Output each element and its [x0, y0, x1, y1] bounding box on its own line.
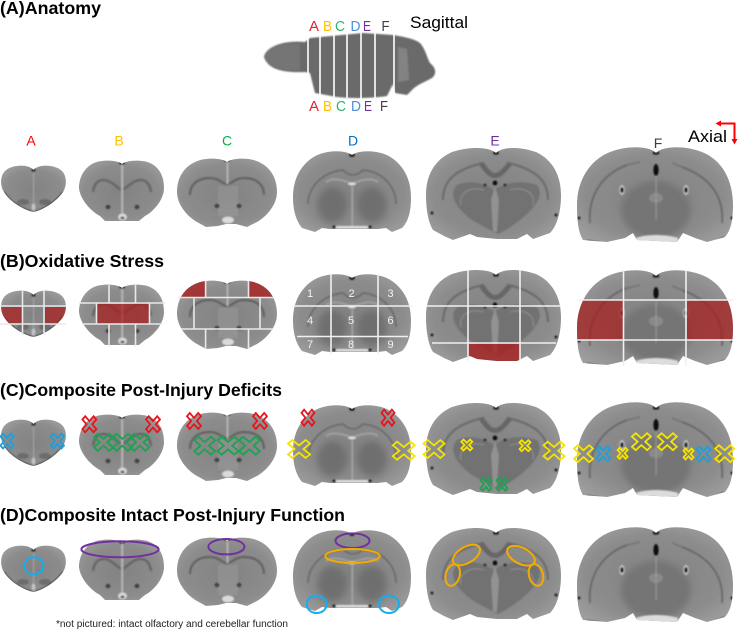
slice D with grid and region numbers: 3	[387, 288, 394, 300]
bottom slice letters: B	[323, 99, 332, 115]
slice D	[293, 151, 411, 232]
title: (B) Oxidative Stress: (B)Oxidative Stress	[0, 251, 164, 271]
title: (C) Composite Post-Injury Deficits: (C)Composite Post-Injury Deficits	[0, 380, 282, 400]
column letters	[26, 132, 662, 151]
row D: intact function slices	[1, 527, 733, 623]
slice C with grid	[177, 277, 278, 349]
slice B	[79, 161, 164, 221]
top slice letters: C	[335, 19, 345, 35]
purple ovals	[81, 533, 370, 557]
slice C	[177, 537, 277, 606]
slice D with grid and region numbers: 6	[387, 315, 394, 327]
top slice letters: F	[382, 19, 390, 35]
slice F	[577, 402, 734, 498]
column letters: C	[222, 132, 232, 148]
slice A with grid	[0, 291, 67, 337]
slice B with grid	[79, 285, 165, 346]
column letters: F	[654, 135, 662, 151]
slice E with grid	[426, 270, 561, 364]
slice C	[177, 412, 277, 481]
slice E	[426, 403, 561, 495]
green X markers	[94, 434, 508, 491]
slice D with grid and region numbers: 4	[307, 315, 313, 327]
column letters: B	[114, 132, 124, 148]
slice D with grid and region numbers: 7	[307, 339, 313, 351]
slice C	[177, 158, 277, 227]
slice D	[293, 530, 411, 611]
bottom slice letters: D	[351, 99, 361, 115]
bottom slice letters	[309, 99, 388, 115]
slice D with grid and region numbers: 2	[348, 288, 355, 300]
slice A	[1, 546, 66, 592]
bottom slice letters: E	[364, 99, 372, 115]
row C: post-injury deficit slices	[1, 402, 733, 498]
top slice letters: E	[363, 19, 371, 35]
slice A	[1, 166, 66, 212]
top slice letters: B	[323, 19, 332, 35]
label: Sagittal: Sagittal	[410, 14, 468, 32]
footnote: *not pictured: intact olfactory and cerebellar function	[56, 619, 288, 630]
bottom slice letters: A	[309, 99, 319, 115]
slice B	[79, 540, 164, 600]
slice A	[1, 420, 66, 466]
top slice letters	[309, 19, 390, 35]
top slice letters: A	[309, 19, 319, 35]
slice D with grid and region numbers: 8	[348, 339, 354, 351]
bottom slice letters: F	[380, 99, 388, 115]
label: Axial: Axial	[688, 127, 727, 146]
slice B	[79, 415, 164, 475]
blue X markers	[0, 434, 710, 462]
orange ovals	[325, 541, 546, 587]
row B: oxidative stress slices	[0, 270, 736, 366]
bottom slice letters: C	[336, 99, 346, 115]
sagittal brain view with slice lines	[264, 30, 435, 99]
red X markers	[82, 410, 395, 432]
slice D with grid and region numbers: 9	[387, 339, 394, 351]
yellow X markers	[288, 433, 734, 462]
row A: anatomy brain slices	[1, 147, 733, 243]
slice F	[577, 527, 734, 623]
slice E	[426, 148, 561, 240]
slice D with grid and region numbers: 5	[348, 315, 354, 327]
column letters: D	[348, 132, 358, 148]
blue ovals	[24, 557, 399, 613]
slice D	[293, 405, 411, 486]
arrow: axial orientation	[716, 120, 738, 144]
slice D with grid and region numbers	[292, 274, 412, 355]
column letters: A	[26, 132, 36, 148]
slice F	[577, 147, 734, 243]
slice D with grid and region numbers: 1	[307, 288, 313, 300]
slice E	[426, 528, 561, 620]
top slice letters: D	[350, 19, 360, 35]
column letters: E	[490, 132, 500, 148]
slice F with grid	[576, 270, 736, 366]
title: (D) Composite Intact Post-Injury Function: (D)Composite Intact Post-Injury Function	[0, 505, 345, 525]
